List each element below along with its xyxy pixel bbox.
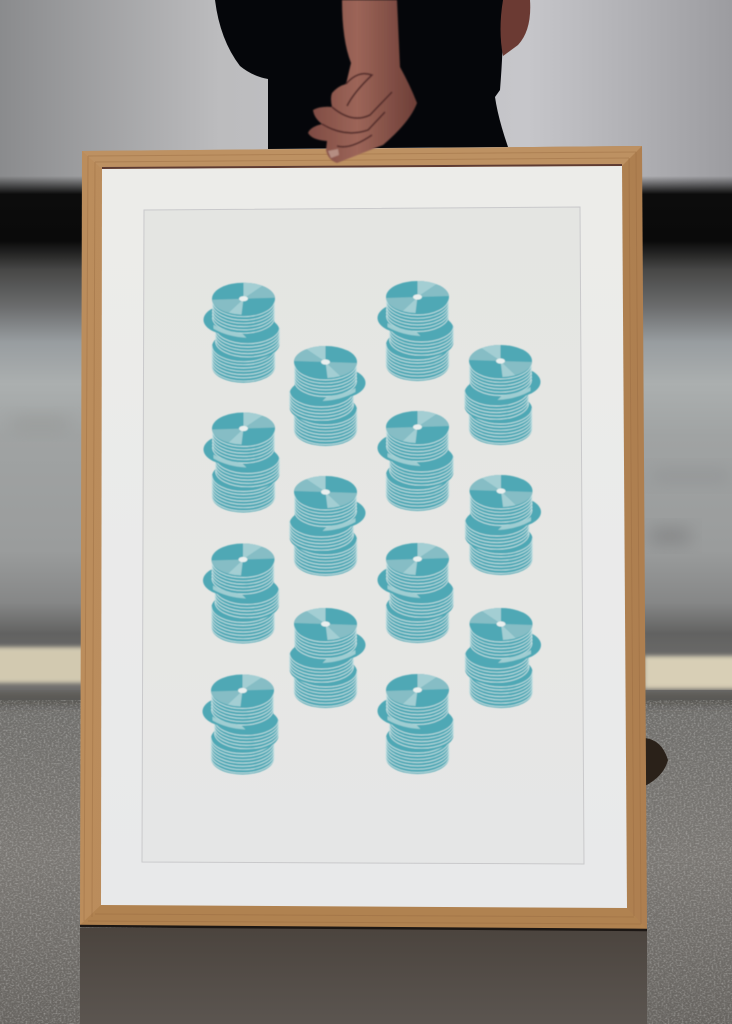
icon: CD stack 8 <box>378 281 454 381</box>
icon: CD stack 1 <box>204 283 280 383</box>
icon: CD stack 14 <box>465 608 541 708</box>
icon: CD stack 7 <box>290 608 366 708</box>
wooden frame <box>80 146 647 930</box>
mat board <box>101 166 627 908</box>
CD stack column 2 <box>290 346 366 708</box>
CD stack column 4 <box>464 345 541 708</box>
person: holding hand <box>308 0 417 163</box>
icon: CD stack 6 <box>290 476 366 576</box>
person: trousers <box>215 0 508 149</box>
background: near floor <box>0 690 732 1024</box>
CD stack column 3 <box>378 281 454 774</box>
poster print <box>142 207 584 864</box>
CD stack column 1 <box>202 283 280 774</box>
background: pale floor stripe, right <box>644 656 732 690</box>
background: blurred skirting and far floor <box>0 176 732 700</box>
icon: CD stack 5 <box>290 346 366 446</box>
icon: CD stack 11 <box>378 674 454 774</box>
background: wall <box>0 0 732 200</box>
icon: CD stack 4 <box>202 674 278 774</box>
person: far hand <box>500 0 530 56</box>
icon: CD stack 12 <box>464 345 540 445</box>
shoe behind frame <box>645 738 668 786</box>
icon: CD stack 13 <box>465 475 541 575</box>
frame reflection on floor <box>80 928 647 1024</box>
icon: CD stack 9 <box>378 411 454 511</box>
icon: CD stack 2 <box>204 412 280 512</box>
background: pale floor stripe, left <box>0 647 85 683</box>
icon: CD stack 10 <box>378 543 454 643</box>
icon: CD stack 3 <box>203 543 279 644</box>
